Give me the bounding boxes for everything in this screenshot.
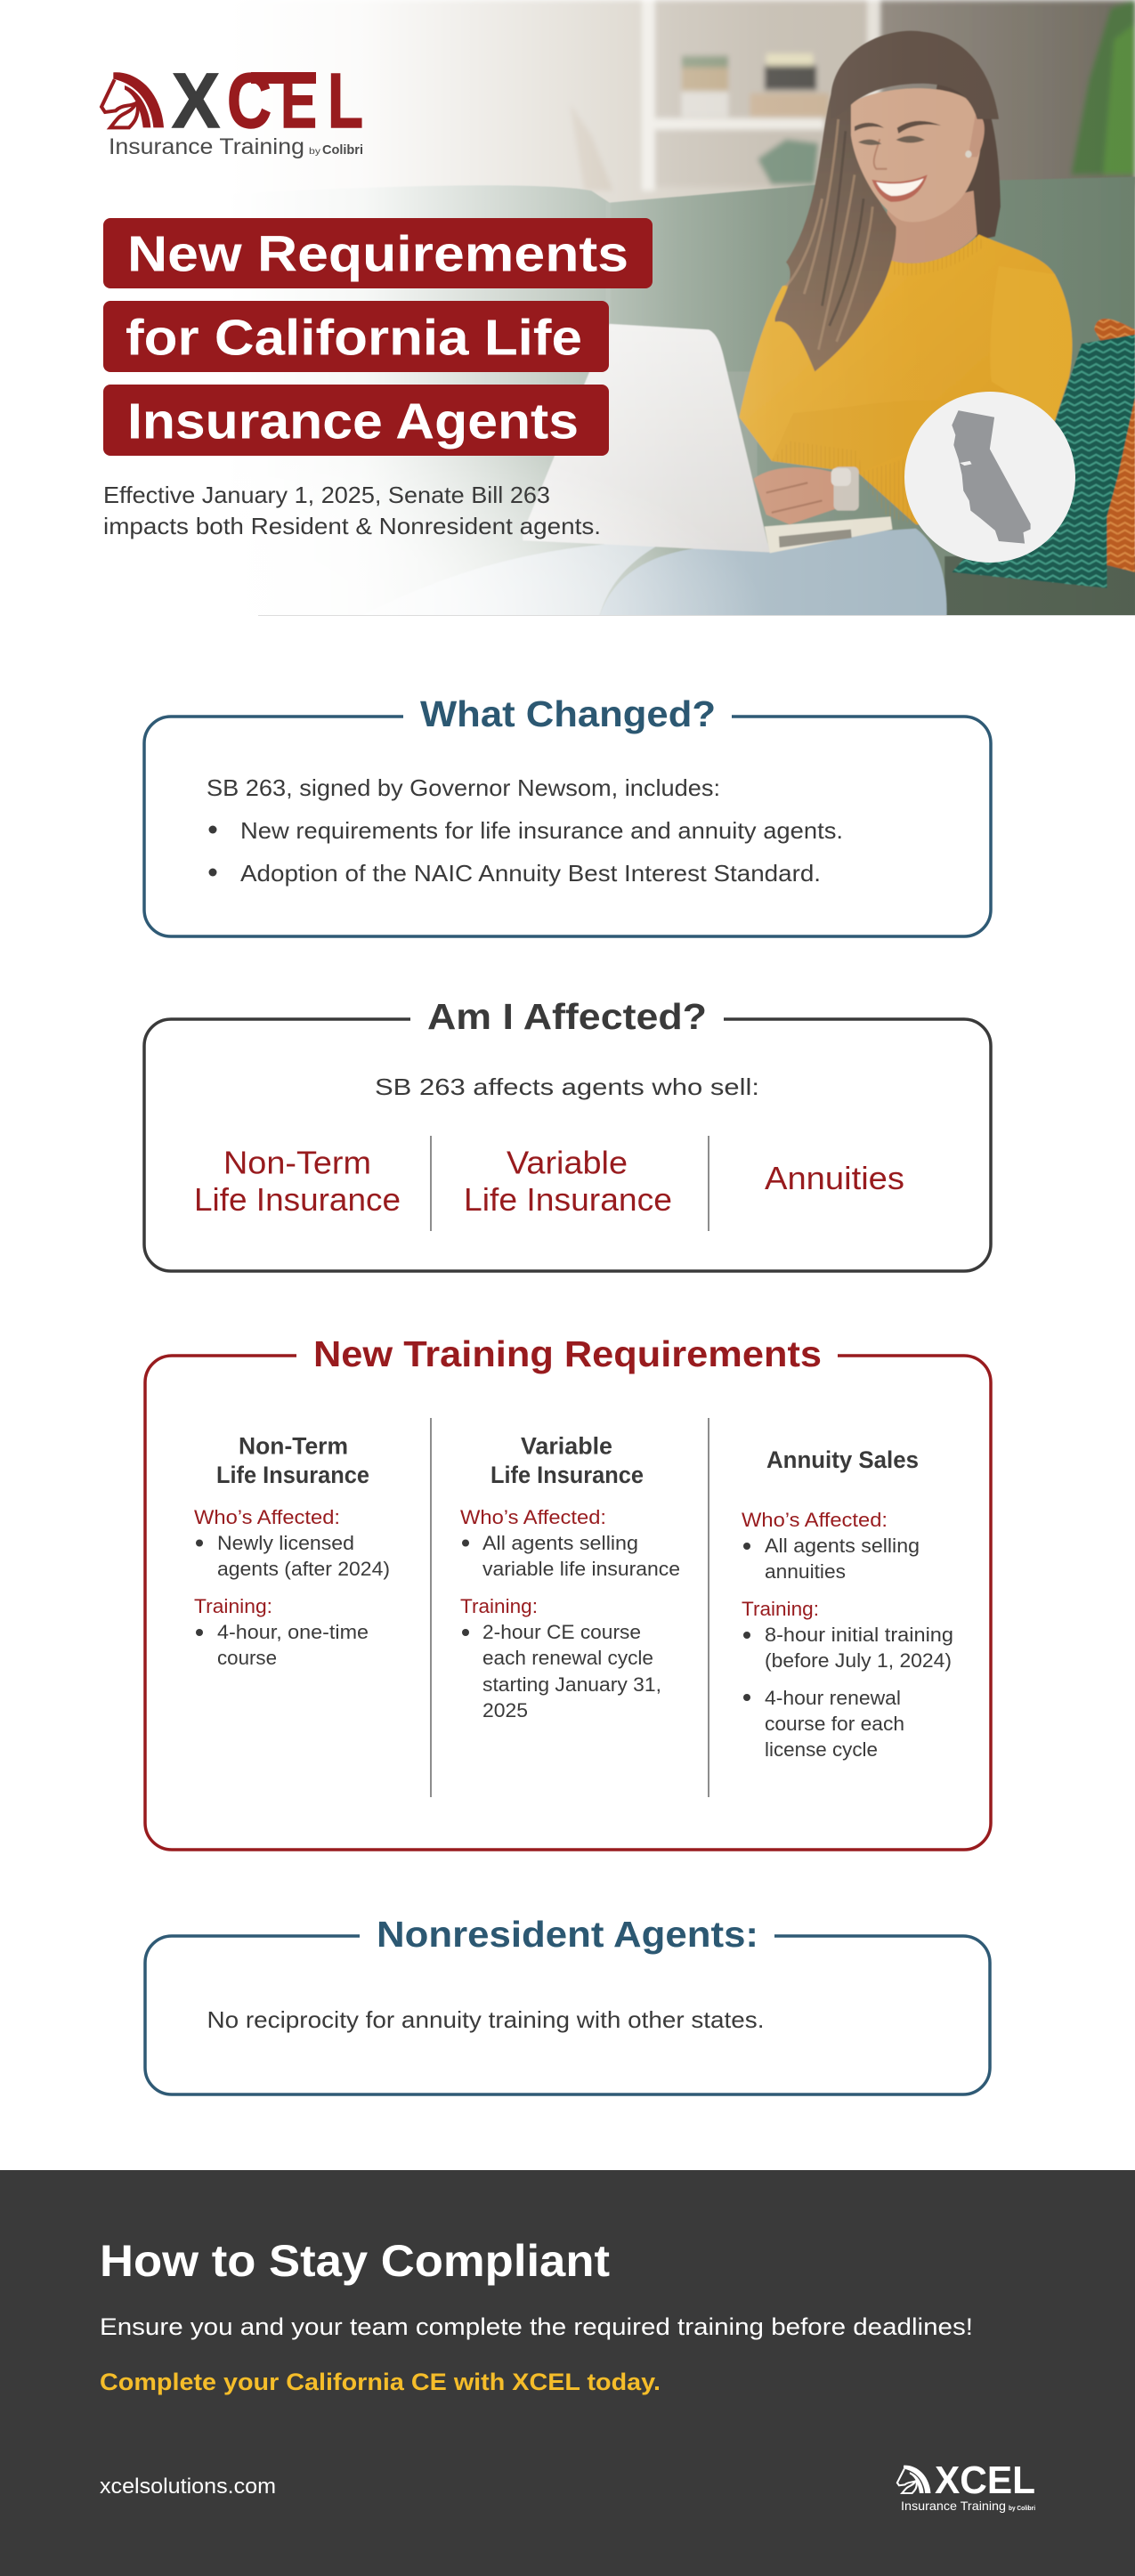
column: variable life insurance: starting January 31,	[482, 1673, 661, 1696]
hero title: New Requirements	[127, 226, 628, 283]
column: variable life insurance: Variable	[521, 1433, 612, 1460]
white fade overlay	[0, 0, 1135, 616]
text: call to action: Complete your California CE with XCEL today.	[100, 2369, 661, 2395]
label: variable life insurance	[464, 1145, 672, 1218]
heading: new training requirements: New Training Requirements	[313, 1333, 822, 1374]
left hair	[774, 87, 896, 371]
logo: XCEL Insurance Training: L	[328, 58, 363, 144]
heading: nonresident agents: Nonresident Agents:	[377, 1914, 758, 1955]
column: non-term life insurance: Life Insurance	[216, 1462, 369, 1488]
column: non-term life insurance: Non-Term	[239, 1433, 348, 1460]
text: intro and bullets: Adoption of the NAIC Annuity Best Interest Standard.	[240, 860, 821, 887]
column: non-term life insurance: Newly licensed	[217, 1532, 354, 1554]
back hair	[930, 48, 1001, 240]
column: variable life insurance: each renewal cycle	[482, 1647, 653, 1669]
hero subtitle	[103, 482, 601, 539]
column: annuity sales: All agents selling	[765, 1535, 920, 1557]
column: variable life insurance	[460, 1433, 680, 1721]
text: no reciprocity: No reciprocity for annuity training with other states.	[207, 2006, 764, 2033]
panel: nonresident agents	[145, 1914, 990, 2094]
column: non-term life insurance: Who’s Affected:	[194, 1506, 340, 1528]
text: ensure training: Ensure you and your team complete the required training before deadlines!	[100, 2313, 973, 2340]
column: variable life insurance: Life Insurance	[490, 1462, 644, 1488]
column: non-term life insurance: 4-hour, one-time	[217, 1621, 369, 1643]
eyes and smile	[855, 121, 941, 134]
column: variable life insurance: Training:	[460, 1595, 538, 1617]
hero subtitle: Effective January 1, 2025, Senate Bill 263	[103, 482, 550, 508]
column: annuity sales: Training:	[742, 1598, 819, 1620]
column: annuity sales	[742, 1446, 953, 1761]
face	[851, 88, 981, 222]
label: non-term life insurance: Life Insurance	[194, 1181, 401, 1218]
label: variable life insurance: Life Insurance	[464, 1181, 672, 1218]
footer logo: XCEL	[935, 2459, 1035, 2502]
column: annuity sales: 4-hour renewal	[765, 1687, 901, 1709]
text: intro and bullets	[207, 774, 843, 887]
hero section	[0, 0, 1135, 620]
column: non-term life insurance: course	[217, 1647, 277, 1669]
logo: XCEL Insurance Training: X	[172, 58, 220, 144]
logo: XCEL Insurance Training: Colibri	[322, 142, 363, 158]
top hair	[831, 31, 999, 119]
hero title: for California Life	[126, 310, 582, 367]
text: intro and bullets: New requirements for life insurance and annuity agents.	[240, 817, 843, 844]
column: annuity sales: course for each	[765, 1713, 904, 1735]
hero title: Insurance Agents	[127, 393, 579, 450]
jeans	[598, 529, 946, 620]
hands	[754, 467, 837, 524]
text: intro and bullets: SB 263, signed by Governor Newsom, includes:	[207, 774, 720, 801]
laptop	[523, 324, 770, 552]
logo: XCEL Insurance Training: C	[227, 58, 272, 144]
column: annuity sales: license cycle	[765, 1738, 878, 1761]
footer logo: Insurance Training	[901, 2499, 1006, 2513]
pillows	[1094, 319, 1135, 572]
heading: how to stay compliant: How to Stay Compliant	[100, 2236, 610, 2286]
column: variable life insurance: Who’s Affected:	[460, 1506, 606, 1528]
hero photo: woman with laptop on sofa	[353, 0, 1135, 615]
california icon	[904, 392, 1075, 563]
column: non-term life insurance: agents (after 2024)	[217, 1558, 390, 1580]
column: variable life insurance: 2-hour CE course	[482, 1621, 641, 1643]
text: website: xcelsolutions.com	[100, 2475, 276, 2499]
column: annuity sales: Annuity Sales	[766, 1446, 919, 1473]
label: non-term life insurance	[194, 1145, 401, 1218]
column: non-term life insurance: Training:	[194, 1595, 272, 1617]
column: non-term life insurance	[194, 1433, 390, 1669]
footer logo	[897, 2459, 1035, 2513]
panel: am I affected	[144, 996, 991, 1271]
panel: what changed	[144, 693, 991, 936]
logo: XCEL Insurance Training: Insurance Training	[109, 134, 304, 159]
heading: am I affected: Am I Affected?	[427, 996, 707, 1037]
sweater	[739, 234, 1072, 529]
label: non-term life insurance: Non-Term	[223, 1145, 371, 1180]
column: variable life insurance: All agents selling	[482, 1532, 638, 1554]
icon: white horse head	[897, 2466, 930, 2493]
icon: horse head	[101, 72, 164, 127]
footer panel	[0, 2170, 1135, 2576]
heading: what changed: What Changed?	[420, 693, 716, 734]
column: variable life insurance: 2025	[482, 1699, 528, 1721]
panel: new training requirements	[145, 1333, 991, 1850]
column: annuity sales: annuities	[765, 1560, 846, 1583]
hero title	[103, 218, 653, 456]
logo: XCEL Insurance Training	[101, 58, 363, 159]
column: variable life insurance: variable life insurance	[482, 1558, 680, 1580]
logo: XCEL Insurance Training: by	[309, 147, 320, 157]
column: annuity sales: 8-hour initial training	[765, 1624, 953, 1646]
sweater ribbing	[860, 253, 955, 523]
label: variable life insurance: Variable	[507, 1145, 628, 1180]
column: annuity sales: (before July 1, 2024)	[765, 1649, 952, 1672]
footer logo: by Colibri	[1009, 2506, 1035, 2512]
neck	[887, 190, 977, 263]
hero subtitle: impacts both Resident & Nonresident agents.	[103, 513, 601, 539]
logo: XCEL Insurance Training: E	[280, 58, 317, 144]
text: agents who sell: SB 263 affects agents who sell:	[375, 1073, 759, 1100]
column: annuity sales: Who’s Affected:	[742, 1509, 888, 1531]
label: annuities: Annuities	[765, 1160, 904, 1196]
